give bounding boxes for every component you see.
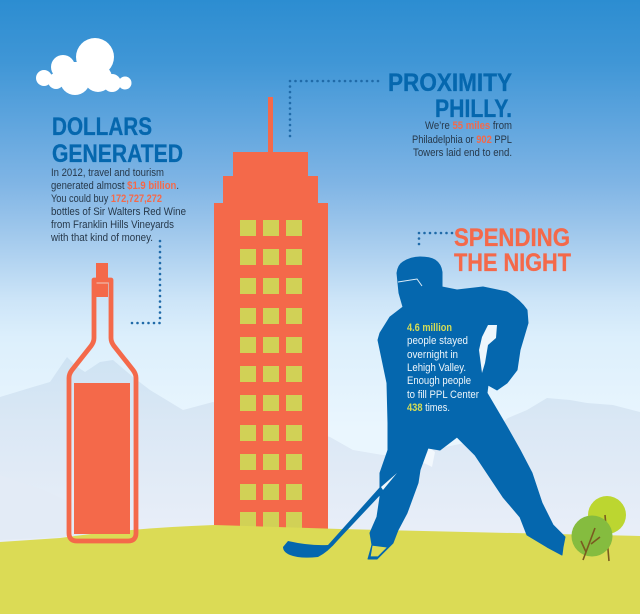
- body text: dollars: generated almost $1.9 billion.: [51, 180, 179, 192]
- heading: spending the night: [454, 224, 571, 277]
- stick highlight: [381, 473, 397, 490]
- section: spending the night: [407, 224, 571, 414]
- dotted connector: player: [419, 233, 452, 245]
- hockey player: [283, 257, 565, 559]
- body text: overnight stays: to fill PPL Center: [407, 389, 479, 401]
- building windows: [240, 220, 302, 528]
- body text: proximity: Philadelphia or 902 PPL: [412, 134, 512, 146]
- distant mountains: [0, 357, 640, 545]
- dotted connector: building: [290, 81, 378, 138]
- building: [214, 97, 328, 530]
- visor line: [398, 279, 422, 286]
- body text: dollars: with that kind of money.: [50, 232, 153, 244]
- heading: proximity philly: [388, 69, 512, 123]
- heading: proximity philly: PHILLY.: [435, 95, 512, 123]
- body text: overnight stays: people stayed: [407, 335, 468, 347]
- heading: dollars generated: GENERATED: [52, 140, 183, 168]
- body text: dollars: [50, 167, 186, 244]
- body text: overnight stays: [407, 322, 479, 414]
- heading: spending the night: SPENDING: [454, 224, 570, 252]
- ground: [0, 525, 640, 614]
- arm gap: [479, 325, 497, 373]
- hockey stick: [283, 473, 397, 558]
- body text: overnight stays: 4.6 million: [407, 322, 452, 334]
- cloud: [36, 38, 132, 95]
- section: proximity philly: [388, 69, 512, 159]
- body text: overnight stays: Lehigh Valley.: [407, 362, 466, 374]
- section: dollars generated: [50, 113, 186, 244]
- heading: dollars generated: DOLLARS: [52, 113, 152, 141]
- body text: dollars: from Franklin Hills Vineyards: [51, 219, 174, 231]
- wine bottle: [69, 263, 136, 541]
- body text: proximity: [412, 120, 512, 159]
- body text: proximity: We’re 55 miles from: [425, 120, 512, 132]
- body text: dollars: bottles of Sir Walters Red Wine: [51, 206, 186, 218]
- body text: overnight stays: Enough people: [407, 375, 471, 387]
- heading: spending the night: THE NIGHT: [454, 249, 571, 277]
- body text: overnight stays: 438 times.: [407, 402, 450, 414]
- heading: dollars generated: [52, 113, 183, 168]
- body text: overnight stays: overnight in: [407, 349, 458, 361]
- skate detail: [370, 545, 388, 557]
- trees: [572, 496, 626, 561]
- body text: proximity: Towers laid end to end.: [413, 147, 512, 159]
- dotted connector: bottle: [131, 241, 160, 323]
- body text: dollars: You could buy 172,727,272: [51, 193, 162, 205]
- body text: dollars: In 2012, travel and tourism: [51, 167, 164, 179]
- heading: proximity philly: PROXIMITY: [388, 69, 512, 97]
